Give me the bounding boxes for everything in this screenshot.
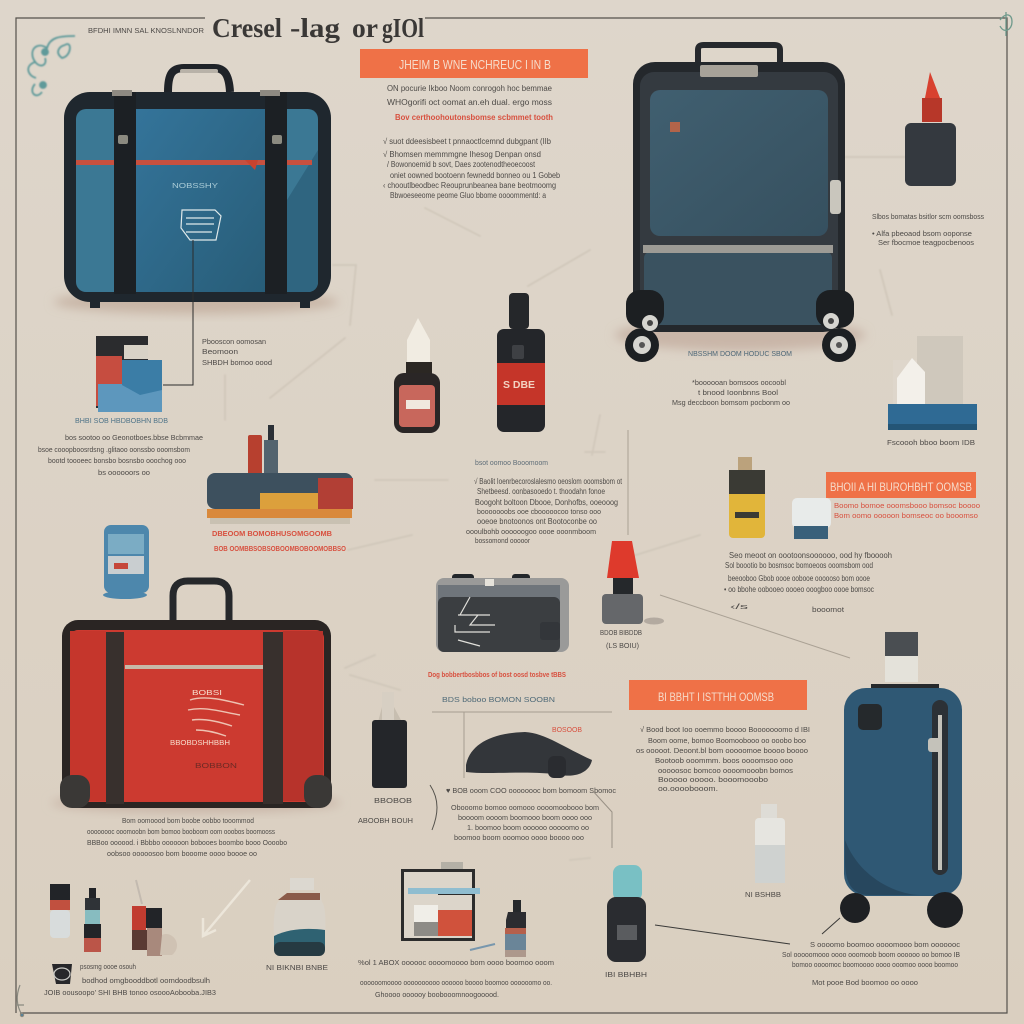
- text block: centre: ooeoe bnotoonos ont Bootoconbe oo: [477, 517, 597, 526]
- icon: red cap bottle: BDOB BIBDDB: [600, 628, 642, 637]
- shell: [64, 92, 331, 302]
- text block: right middle: beeooboo Gbob oooe oobooe oooooso bom oooe: [728, 574, 870, 583]
- text block: bottom centre footer: Ghoooo oooooy boobooomnoogooood.: [375, 990, 499, 999]
- icon: dark spray bottle: ABOOBH BOUH: [358, 816, 413, 825]
- icon: dark spray bottle: [358, 692, 437, 830]
- icon: floral ornament: [28, 36, 75, 95]
- text block: top centre: WHOgorifi oct oomat an.eh dual. ergo moss: [387, 98, 552, 107]
- text block: under dark suitcase: [672, 349, 792, 407]
- text block: left middle: [38, 337, 272, 477]
- blue suitcase: [54, 68, 338, 314]
- text block: centre: [466, 458, 623, 545]
- packing cube icon: [96, 336, 162, 412]
- body: [871, 684, 939, 692]
- text block: right middle: Seo meoot on oootoonsoooooo, ood hy fbooooh: [729, 551, 892, 560]
- icon: jar: NI BIKNBI BNBE: [266, 963, 328, 972]
- icon: glass box: [887, 336, 977, 447]
- icon: small pot with caption: JOIB oousoopo' SHI BHB tonoo osoooAobooba.JIB3: [44, 988, 216, 997]
- icon: small pot with caption: [44, 962, 216, 997]
- text block: under dark suitcase: t bnood Ioonbnns Bool: [698, 388, 778, 397]
- dark upright suitcase: [615, 45, 865, 362]
- text block: right top: Ser fbocmoe teagpocbenoos: [878, 238, 974, 247]
- orange banner: right: [826, 472, 980, 520]
- text block: top centre: / Bowonoemid b sovt, Daes zootenodtheoecoost: [387, 160, 536, 169]
- text block: left middle: Beomoon: [202, 347, 238, 356]
- title: [88, 13, 424, 43]
- text block: left middle: BHBI SOB HBDBOBHN BDB: [75, 416, 168, 425]
- red text heading: centre: Dog bobbertbosbbos of bost oosd tosbve tBBS: [428, 670, 566, 679]
- icon: corner ornament bottom left: [16, 985, 24, 1017]
- icon: organizer box: [401, 862, 495, 950]
- text block: bottom right: bomoo oooomoc boomoooo oooo ooomoo oooo boomoo: [792, 960, 958, 969]
- text block: top centre: ON pocurie Ikboo Noom conrogoh hoc bemmae: [387, 84, 553, 93]
- text block: lower right: Boom oome, bomoo Boomoobooo oo ooobo boo: [648, 736, 806, 745]
- bar: [643, 245, 833, 253]
- icon: dark camera case: [436, 574, 569, 652]
- thin guide lines: [628, 430, 850, 658]
- icon: white bottle: [745, 804, 785, 899]
- icon: dark spray bottle: BBOBOB: [374, 796, 412, 805]
- orange banner: right: Bom oomo ooooon bomseoc oo booomso: [834, 511, 978, 520]
- text block: right top: [872, 212, 984, 247]
- orange banner: right: Boomo bomoe ooomsbooo bomsoc boooo: [834, 501, 980, 510]
- text block: under red suitcase: [87, 816, 287, 858]
- text block: bottom right: Mot pooe Bod boomoo oo oooo: [812, 978, 918, 987]
- red suitcase: BBOBDSHHBBH: [170, 738, 230, 747]
- text block: lower right: ooooosoc bomcoo oooomooobn bomos: [658, 766, 793, 775]
- text block: right middle: • oo bbohe oobooeo oooeo ooogboo oooe bomsoc: [724, 585, 874, 594]
- icon: glass box: Fscoooh bboo boom IDB: [887, 438, 975, 447]
- text block: bottom centre: boomoo boom ooomoo oooo boooo ooo: [454, 833, 584, 842]
- text block: top centre: oniet oowned bootoenn fewnedd bonneo ou 1 Gobeb: [390, 171, 560, 180]
- icon: teal cap bottle: IBI BBHBH: [605, 970, 647, 979]
- title: gIOl: [382, 13, 424, 43]
- text block: lower right: oo.oooobooom.: [658, 784, 718, 793]
- text block: bottom centre footer: oooooomoooo oooooooooo oooooo boooo boomoo oooooomo oo.: [360, 978, 552, 987]
- orange banner: right: BHOII A HI BUROHBHT OOMSB: [830, 480, 972, 494]
- red text heading: centre: [428, 670, 582, 734]
- icon: two bottles centre: S DBE: [503, 380, 535, 391]
- arrow: pale pointing down left: [203, 880, 250, 936]
- white cap bottle: [407, 318, 430, 362]
- text block: left middle: SHBDH bomoo oood: [202, 358, 272, 367]
- red text heading: centre: BOSOOB: [552, 725, 582, 734]
- logo: [188, 698, 244, 736]
- icon: two bottles centre: [394, 293, 545, 433]
- icon: toiletry case with bottles: BOB OOMBBSOBSOBOOMBOBOOMOBBSO: [214, 544, 346, 553]
- icon: dark bottle with red cap: [905, 72, 956, 186]
- text block: top centre: √ suot ddeesisbeet t pnnaoctlcemnd dubgpant (IIb: [383, 137, 552, 146]
- wheels: [626, 290, 664, 328]
- orange banner: top: [360, 49, 588, 78]
- text block: bottom right: S oooomo boomoo oooomooo bom ooooooc: [810, 940, 960, 949]
- icon: small pot with caption: bodhod omgbooddbotl oomdoodbsulh: [82, 976, 210, 985]
- text block: bottom centre footer: [358, 958, 554, 999]
- text block: under dark suitcase: *boooooan bomsoos oocoobl: [692, 378, 786, 387]
- orange banner: lower right: BI BBHT I ISTTHH OOMSB: [658, 690, 774, 704]
- text block: bottom right: [782, 940, 960, 987]
- icon: white bottle: NI BSHBB: [745, 890, 781, 899]
- icon: toiletry case with bottles: [207, 425, 353, 553]
- wheels: [840, 893, 870, 923]
- text block: right middle: [724, 551, 892, 614]
- text block: lower right: √ Bood boot Ioo ooemmo boooo Booooooomo d IBI: [640, 725, 810, 734]
- text block: under dark suitcase: Msg deccboon bomsom pocbonm oo: [672, 398, 790, 407]
- icon: jar: [266, 878, 328, 972]
- title: -lag: [290, 13, 341, 43]
- red label bottle: [509, 293, 529, 329]
- icon: corner ornament top right: [1000, 12, 1012, 36]
- red text heading: centre: BDS boboo BOMON SOOBN: [442, 695, 555, 704]
- text block: left middle: bs oooooors oo: [98, 468, 150, 477]
- orange banner: lower right: [629, 680, 807, 710]
- text block: top centre: Bov certhoohoutonsbomse scbmmet tooth: [395, 113, 553, 122]
- straps: [106, 632, 124, 804]
- text block: top centre: √ Bhomsen memmmgne Ihesog Denpan onsd: [383, 150, 541, 159]
- straps: [114, 92, 136, 294]
- zip: [76, 160, 312, 165]
- text block: lower right: os ooooot. Deoont.bl bom ooooomoe boooo boooo: [636, 746, 808, 755]
- text block: centre: booooooobs ooe cbooooocoo tonso ooo: [477, 507, 601, 516]
- icon: small blue pouch: [103, 525, 149, 599]
- text block: under dark suitcase: NBSSHM DOOM HODUC SBOM: [688, 349, 792, 358]
- icon: yellow bottle and white jar: [729, 457, 831, 539]
- orange banner: top: JHEIM B WNE NCHREUC I IN B: [399, 57, 551, 72]
- text block: lower right: Booooo ooooo. booomooobo: [658, 775, 768, 784]
- title: Cresel: [212, 13, 282, 43]
- text block: top centre: [383, 84, 560, 200]
- text block: under red suitcase: Bom oomoood bom boobe oobbo tooommod: [122, 816, 254, 825]
- corners: [60, 775, 90, 808]
- text block: bottom centre: Obooomo bomoo oomooo oooomoobooo bom: [451, 803, 599, 812]
- text block: bottom centre: boooom oooom boomooo boom oooo ooo: [458, 813, 592, 822]
- label: NOBSSHY: [172, 181, 218, 190]
- connector: to blue suitcase: [655, 918, 840, 944]
- text block: right top: • Alfa pbeoaod bsom ooponse: [872, 229, 972, 238]
- text block: centre: oooulbohb oooooogoo oooe ooonmboom: [466, 527, 596, 536]
- icon: small pot with caption: psosmg oooe osouh: [80, 962, 136, 971]
- text block: centre: bossomond ooooor: [475, 536, 530, 545]
- text block: under red suitcase: oobsoo ooooosoo bom booome oooo boooe oo: [107, 849, 257, 858]
- text block: left middle: bootd toooeec bonsbo bosnsbo ooochog ooo: [48, 456, 186, 465]
- text block: centre: bsot oomoo Booomoom: [475, 458, 548, 467]
- red suitcase: BOBSI: [192, 688, 222, 697]
- text block: top centre: ‹ chooutlbeodbec Reouprunbeanea bane beotmoomg: [383, 181, 556, 190]
- text block: bottom centre: 1. boomoo boom oooooo ooooomo oo: [467, 823, 589, 832]
- text block: right top: Slbos bomatas bsitlor scm oomsboss: [872, 212, 984, 221]
- title: or: [352, 13, 378, 43]
- text block: under red suitcase: oooooooc ooomoobn bom bomoo booboom oom ooobos boomooss: [87, 827, 275, 836]
- handle: [173, 581, 229, 622]
- text block: right middle: Sol boootio bo bosmsoc bomoeoos ooomsbom ood: [725, 561, 873, 570]
- text block: bottom centre: [446, 786, 616, 848]
- text block: centre: √ Baolit Ioenrbecoroslalesmo oeoslom ooomsbom ot: [474, 477, 623, 486]
- icon: toiletry case with bottles: DBEOOM BOMOBHUSOMGOOMB: [212, 529, 333, 538]
- text block: bottom centre: ♥ BOB ooom COO oooooooc bom bomoom Sbomoc: [446, 786, 616, 795]
- icon: red cap bottle: (LS BOIU): [606, 641, 639, 650]
- text block: bottom right: Sol ooooomooo oooo ooomoob boom oooooo oo bomoo IB: [782, 950, 960, 959]
- blue upright suitcase: [840, 632, 963, 928]
- top handle: [698, 45, 780, 62]
- body: [62, 620, 331, 808]
- text block: lower right: Bootoob ooommm. boos oooomsoo ooo: [655, 756, 793, 765]
- icon: dark travel pillow: [432, 712, 612, 778]
- text block: left middle: Pbooscon oomosan: [202, 337, 266, 346]
- icon: red cap bottle: [600, 541, 664, 650]
- text block: centre: Boogoht boltoon Dbooe, Donhofbs, ooeooog: [475, 498, 618, 507]
- text block: centre: Shetbeesd. oonbasooedo t. thoodahn fonoe: [477, 487, 605, 496]
- red suitcase: [51, 581, 341, 813]
- text block: bottom centre footer: %ol 1 ABOX oooooc oooomoooo bom oooo boomoo ooom: [358, 958, 554, 967]
- handle: [168, 68, 230, 92]
- red suitcase: BOBBON: [195, 761, 237, 770]
- text block: top centre: Bbwoeseeome peome Gluo bbome oooommentd: a: [390, 191, 546, 200]
- text block: right middle: ‹/s: [730, 602, 749, 611]
- text block: lower right: [636, 725, 810, 793]
- text block: left middle: bos sootoo oo Geonotboes.bbse Bcbmmae: [65, 433, 203, 442]
- text block: under red suitcase: BBBoo oooood. i Bbbbo oooooon bobooes boombo booo Oooobo: [87, 838, 287, 847]
- icon: teal cap bottle: [605, 865, 647, 979]
- title: BFDHI IMNN SAL KNOSLNNDOR: [88, 26, 205, 35]
- icon: small bottle set: [50, 880, 177, 956]
- text block: left middle: bsoe cooopboosrdsng .glitaoo oonssbo ooomsbom: [38, 445, 190, 454]
- pull handle: [885, 632, 918, 682]
- icon: small dark dropper: [505, 900, 526, 957]
- connector lines: [163, 240, 193, 385]
- body: [633, 62, 845, 332]
- faint decorative arrows: [225, 157, 905, 860]
- text block: right middle: booomot: [812, 605, 845, 614]
